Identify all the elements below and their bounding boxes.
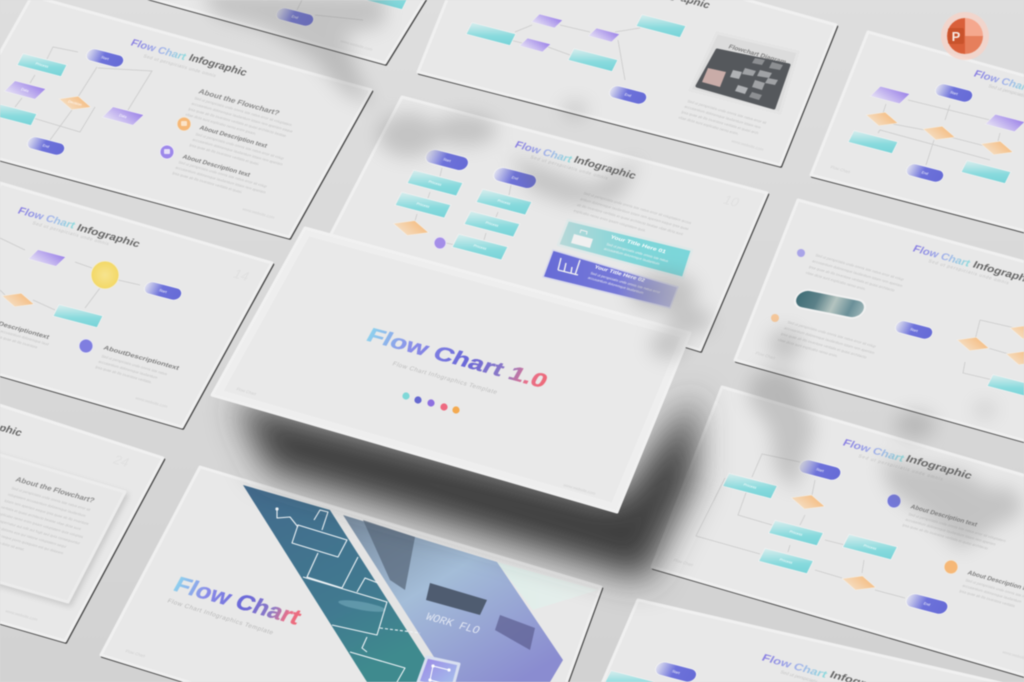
inner card: About the Flowchart? — [14, 475, 96, 505]
slide: right lower flowchart: Flow Chart — [673, 558, 695, 568]
flowchart nodes: Start — [909, 327, 919, 333]
about text block: ipsa quae ab illo inventore veritatis et quasi. — [172, 171, 243, 194]
blue flowchart band — [243, 485, 450, 682]
title: Flow Chart — [513, 140, 574, 165]
description block 1: ipsa quae ab illo inventore veritatis et quasi architecto — [902, 523, 989, 551]
cover title: Flow Chart — [170, 572, 307, 629]
cover subtitle: Flow Chart Infographics Template — [166, 598, 275, 636]
slide: right middle: Flow Chart — [755, 351, 777, 361]
about text block: accusantium doloremque laudantium totam rem aperiam eaque — [191, 102, 293, 134]
body text: Sed ut perspiciatis unde omnis iste natus error sit volup — [787, 320, 877, 349]
title: Sed ut perspiciatis unde omnis — [858, 454, 945, 482]
body text: Sed ut perspiciatis unde omnis iste natus error sit voluptatem accus — [583, 191, 692, 225]
body text: explicabo nemo enim ipsam voluptatem quia. — [573, 209, 647, 233]
body text: ipsa quae ab illo inventore veritatis et quasi architecto — [780, 332, 867, 359]
flowchart nodes: End — [921, 171, 929, 176]
about text block: Sed ut perspiciatis unde omnis iste natus error sit volup — [178, 160, 268, 189]
title: Flow Chart — [841, 438, 906, 465]
body text: ab illo inventore veritatis et quasi architecto beatae vitae dicta sunt — [576, 203, 684, 236]
inner card: veritatis et quasi architecto beatae vitae dicta sunt — [0, 505, 82, 531]
slide: bottom right: Start — [671, 669, 681, 675]
body text: Sed ut perspiciatis unde omnis iste natus error sit volup — [815, 253, 905, 282]
slide: left lower about — [0, 402, 164, 642]
flowchart nodes: Start — [100, 55, 110, 61]
title: Infographic — [572, 155, 638, 182]
body text: ipsa quae ab illo inventore veritatis et quasi arch — [681, 110, 759, 135]
body text: vitae dicta sunt explicabo nemo enim. — [805, 271, 867, 291]
about text left — [0, 321, 50, 352]
flowchart nodes — [848, 82, 1024, 184]
title — [16, 206, 142, 250]
flowchart nodes: Start — [815, 467, 825, 473]
about text block: Sed ut perspiciatis unde omnis iste natus error sit volup — [195, 132, 285, 161]
title: Infographic — [75, 223, 142, 250]
icon: purple circle — [79, 339, 93, 353]
about text right: ipsa quae ab illo inventore veritatis. — [95, 365, 153, 384]
slide: bottom right — [595, 600, 1024, 682]
flowchart nodes: Process — [35, 62, 49, 69]
description block 2: accusantium doloremque laudantium — [962, 584, 1022, 604]
title: Sed ut perspiciatis unde omnis — [32, 221, 111, 246]
title — [911, 244, 1024, 287]
about text left: accusantium doloremque laud — [0, 329, 49, 346]
title: Flow Chart — [16, 206, 77, 231]
title: Infographic — [904, 454, 974, 482]
flowchart nodes: Data — [118, 113, 128, 119]
flowchart nodes: End — [923, 602, 931, 607]
description block 1: Sed ut perspiciatis unde omnis iste natus error sit voluptatem — [908, 512, 1007, 543]
flowchart nodes — [723, 458, 950, 616]
title: Sed ut perspiciatis unde omnis — [530, 155, 610, 181]
description block 2: ipsa quae ab illo inventore veritatis — [959, 589, 1016, 608]
flowchart diagram card — [690, 33, 798, 113]
slide: right middle — [735, 200, 1024, 446]
body text: ipsa quae ab illo inventore veritatis et quasi architecto — [808, 265, 895, 292]
about text block: accusantium doloremque laudantium totam rem aperiam — [192, 138, 283, 166]
icon: purple circle — [887, 494, 901, 508]
body text: vitae dicta sunt explicabo nemo enim. — [777, 338, 839, 358]
hero subtitle: Flow Chart Infographics Template — [391, 361, 499, 396]
flowchart nodes — [893, 319, 1024, 398]
hero slide: www.website.com — [563, 483, 597, 496]
slide: top right flowchart — [811, 32, 1024, 236]
flowchart nodes: Process — [779, 558, 793, 565]
slide: top strip: End — [291, 15, 299, 20]
about text right: Sed ut perspiciatis unde omnis iste natus — [101, 354, 168, 376]
description block 2 — [959, 570, 1024, 611]
icon: orange circle — [944, 560, 958, 574]
about text right — [95, 345, 180, 387]
card: your title here 01: Your Title Here 01 — [609, 235, 667, 255]
slide: bottom centre cover: Flow Chart — [125, 649, 147, 659]
inner card: Sed ut perspiciatis unde omnis iste natus error sit — [11, 486, 91, 512]
flowchart diagram card: Flowchart Diagram — [727, 44, 788, 66]
icon: powerpoint logo: P — [952, 29, 961, 44]
flowchart nodes: Process — [428, 180, 442, 187]
title: flow chart infographic — [129, 38, 249, 79]
about text block — [160, 87, 296, 220]
body text: antium doloremque laudantium totam rem aperiam eaque ipsa quae — [579, 197, 689, 231]
title — [760, 653, 899, 682]
flowchart nodes: End — [511, 176, 519, 181]
slide: left middle: www.website.com — [135, 396, 169, 409]
description block 1: About Description text — [909, 504, 978, 528]
card: your title here 02: accusantium doloremque laudantium — [587, 276, 644, 295]
inner card: totam rem aperiam eaque ipsa quae ab illo inventore — [4, 499, 89, 526]
photo band: WORK FLO — [423, 612, 482, 637]
flowchart nodes: Start — [949, 90, 959, 96]
hero drop shadow — [235, 395, 695, 580]
slide: left lower about: www.website.com — [5, 609, 39, 622]
card: your title here 01 — [558, 220, 692, 278]
about text block: About Description text — [181, 154, 251, 179]
card: your title here 02 — [543, 250, 678, 308]
flowchart nodes: End — [42, 144, 50, 149]
about text block: About Description text — [198, 125, 268, 150]
slide: middle behind hero — [330, 97, 768, 352]
body text: vitae dicta sunt explicabo nemo enim. — [678, 116, 739, 136]
slide: top centre flowchart diagram — [418, 0, 837, 166]
slide: top left flowchart with about text — [0, 0, 372, 238]
about text right: accusantium doloremque laudantium — [98, 360, 158, 380]
flowchart nodes: Process — [497, 199, 511, 206]
slide: left middle: 14 — [231, 267, 253, 284]
image pill — [792, 288, 868, 320]
flowchart nodes: Process — [473, 244, 487, 251]
flowchart nodes — [0, 47, 144, 157]
about text block: vitae dicta sunt explicabo nemo enim ipsam. — [185, 113, 257, 136]
flowchart nodes: Decision — [67, 100, 83, 107]
title: flow chart infographic: Sed ut perspiciatis unde omnis — [143, 54, 218, 78]
title: flow chart infographic: Infographic — [187, 53, 249, 79]
photo band — [343, 515, 598, 682]
title — [841, 438, 974, 482]
flowchart nodes: Start — [158, 288, 168, 294]
inner card — [0, 452, 125, 602]
hero slide — [212, 228, 690, 512]
slide: left lower about: 24 — [111, 453, 133, 470]
title: Flow Chart — [911, 244, 972, 269]
slide: middle behind hero: 10 — [721, 193, 742, 210]
hero title: Flow Chart 1.0 — [363, 324, 552, 392]
flowchart nodes: Process — [743, 483, 757, 490]
flowchart nodes — [466, 13, 686, 106]
body text: accusantium doloremque laudantium totam rem aperiam — [783, 326, 875, 355]
title — [513, 140, 638, 182]
flowchart nodes — [390, 148, 539, 260]
body text: Sed ut perspiciatis unde omnis iste natus error sit — [687, 99, 767, 125]
about text block: ipsa quae ab illo inventore veritatis et quasi. — [189, 143, 260, 166]
flowchart nodes: Data — [20, 87, 30, 93]
title: flow chart infographic: Flow Chart — [129, 38, 188, 63]
description block 1 — [902, 504, 1007, 554]
foliage shadow overlay — [200, 0, 1022, 550]
title: Sed ut perspiciatis unde omnis — [928, 259, 1011, 285]
slide: right lower flowchart — [652, 387, 1024, 682]
card: your title here 01: Sed ut perspiciatis unde omnis iste natus — [606, 242, 669, 263]
bullet icon orange — [771, 314, 779, 322]
slide: left middle — [0, 183, 273, 428]
body text — [777, 253, 906, 367]
flowchart nodes: Process — [789, 530, 803, 537]
slide: top centre flowchart diagram: www.website.com — [731, 139, 765, 152]
flowchart nodes — [0, 249, 184, 328]
card: your title here 02: Sed ut perspiciatis unde omnis iste natus error — [590, 271, 662, 295]
slide: top right flowchart: Flow Chart — [830, 165, 852, 175]
flowchart nodes: Process — [485, 221, 499, 228]
about text block: accusantium doloremque laudantium totam rem aperiam — [175, 166, 266, 194]
description block 1: accusantium doloremque laudantium totam rem aperiam — [905, 518, 996, 546]
about text block: Sed ut perspiciatis unde omnis iste natus error sit voluptatem — [194, 96, 293, 127]
body text: accusantium doloremque laudantium totam rem aperiam — [811, 259, 903, 288]
flowchart nodes: Start — [442, 157, 452, 163]
about text block: ipsa quae ab illo inventore veritatis et quasi architecto beatae — [188, 107, 287, 138]
inner card: voluptatem accusantium doloremque laudantium — [7, 493, 86, 518]
icon: powerpoint logo — [941, 12, 989, 60]
colour dots — [402, 392, 460, 414]
flowchart nodes: Process — [863, 544, 877, 551]
icon: network square — [418, 657, 459, 682]
title: Flow Chart — [760, 653, 830, 681]
slide: bottom centre cover — [101, 467, 602, 682]
slide: top strip — [120, 0, 431, 64]
flowchart nodes: Process — [416, 202, 430, 209]
about text right: AboutDescriptiontext — [102, 345, 180, 372]
flowchart nodes: End — [624, 93, 632, 98]
card: your title here 02: Your Title Here 02 — [593, 265, 646, 284]
slide: top strip: www.website.com — [340, 39, 374, 52]
about text block: www.website.com — [242, 207, 276, 220]
about text block: About the Flowchart? — [197, 87, 281, 117]
card: your title here 01: accusantium doloremque laudantium — [603, 247, 660, 266]
body text: accusantium doloremque laudantium totam rem — [684, 105, 761, 130]
hero slide: Flow Chart — [236, 387, 258, 397]
bullet icon purple — [797, 249, 805, 257]
